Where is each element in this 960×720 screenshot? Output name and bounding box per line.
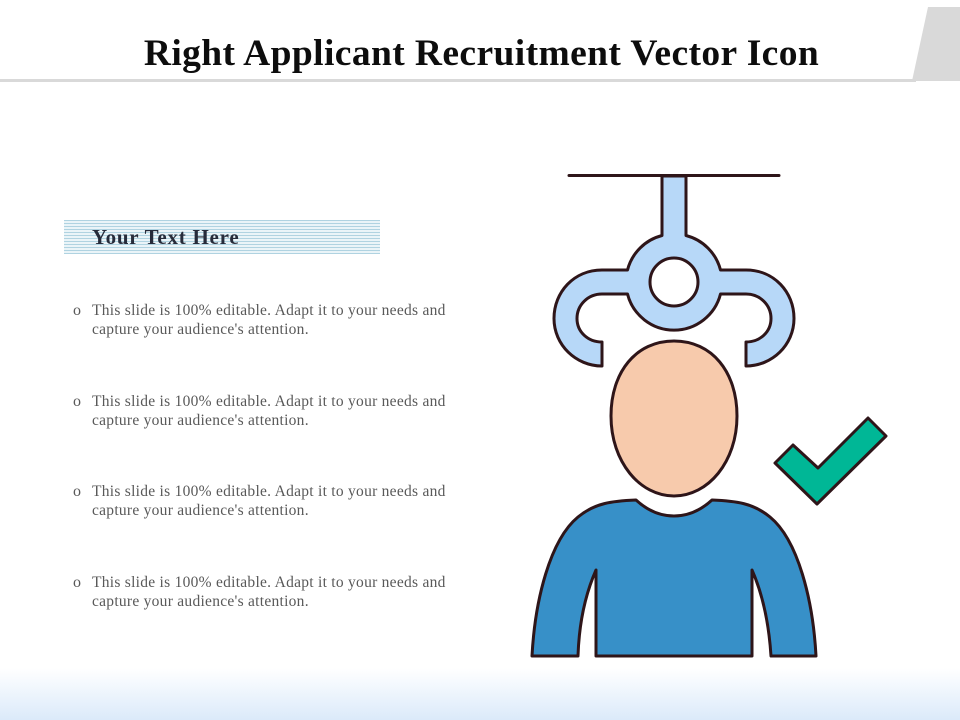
bullet item 3: o: [73, 483, 81, 500]
icon: head: [611, 341, 737, 496]
subheading band: [64, 220, 380, 254]
icon: torso: [532, 500, 816, 656]
bullet item 4: capture your audience's attention.: [92, 593, 309, 610]
header rule: [0, 79, 916, 82]
bullet item 2: capture your audience's attention.: [92, 412, 309, 429]
bullet item 4: o: [73, 574, 81, 591]
bullet item 2: [73, 393, 446, 429]
bullet item 4: This slide is 100% editable. Adapt it to your needs and: [92, 574, 446, 591]
bullet list: [73, 302, 446, 610]
bullet item 1: [73, 302, 446, 338]
icon: claw: [554, 176, 794, 366]
bottom gradient band: [0, 668, 960, 720]
bullet item 3: This slide is 100% editable. Adapt it to your needs and: [92, 483, 446, 500]
bullet item 2: This slide is 100% editable. Adapt it to your needs and: [92, 393, 446, 410]
bullet item 3: [73, 483, 446, 519]
bullet item 1: o: [73, 302, 81, 319]
icon: check mark: [775, 418, 886, 504]
header corner tab: [912, 7, 960, 81]
icon: overhead rail: [569, 174, 779, 177]
bullet item 1: This slide is 100% editable. Adapt it to your needs and: [92, 302, 446, 319]
subheading text: Your Text Here: [92, 225, 239, 249]
title: Right Applicant Recruitment Vector Icon: [144, 33, 819, 74]
bullet item 2: o: [73, 393, 81, 410]
bullet item 1: capture your audience's attention.: [92, 321, 309, 338]
bullet item 4: [73, 574, 446, 610]
bullet item 3: capture your audience's attention.: [92, 502, 309, 519]
